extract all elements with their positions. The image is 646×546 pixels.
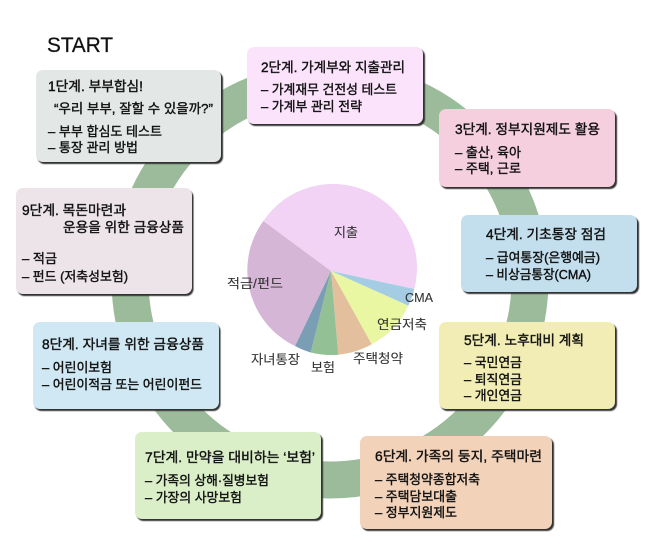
list item: – 통장 관리 방법 xyxy=(48,140,138,155)
heading: step 4: 4단계. 기초통장 점검 xyxy=(486,227,606,242)
list item: – 가계재무 건전성 테스트 xyxy=(261,82,397,97)
list item: – 주택청약종합저축 xyxy=(375,472,480,487)
list item: – 가계부 관리 전략 xyxy=(261,99,362,114)
slice: 연금저축 xyxy=(331,271,408,344)
list item: – 어린이보험 xyxy=(42,360,112,375)
panel: step 2 xyxy=(247,47,425,126)
panel: step 5 xyxy=(439,322,617,411)
panel: step 4 xyxy=(461,215,639,294)
slice: 적금/펀드 xyxy=(247,221,331,346)
panel: step 8 xyxy=(33,322,220,411)
pie label: 연금저축: 연금저축 xyxy=(377,317,427,332)
heading: step 3: 3단계. 정부지원제도 활용 xyxy=(455,122,600,137)
pie label: 지출: 지출 xyxy=(334,225,358,240)
quote: step 1: “우리 부부, 잘할 수 있을까?” xyxy=(54,101,213,116)
circular path ring xyxy=(130,80,530,480)
heading: step 9 line 2: 운용을 위한 금융상품 xyxy=(63,220,184,235)
panel: step 3 xyxy=(439,109,617,189)
list item: – 개인연금 xyxy=(464,388,522,403)
list item: – 가장의 사망보험 xyxy=(145,490,242,505)
list item: – 가족의 상해·질병보험 xyxy=(145,473,269,488)
heading: step 6: 6단계. 가족의 둥지, 주택마련 xyxy=(375,449,542,464)
pie label: 자녀통장: 자녀통장 xyxy=(251,352,300,367)
list item: – 주택, 근로 xyxy=(455,161,521,176)
list item: – 국민연금 xyxy=(464,355,522,370)
heading: step 5: 5단계. 노후대비 계획 xyxy=(464,333,584,348)
list item: – 출산, 육아 xyxy=(455,145,521,160)
list item: – 급여통장(은행예금) xyxy=(486,250,600,265)
heading: step 1: 1단계. 부부합심! xyxy=(48,79,143,94)
panel: step 9 xyxy=(16,188,194,296)
slice: 자녀통장 xyxy=(295,271,331,352)
list item: – 퇴직연금 xyxy=(464,372,522,387)
pie label: 적금/펀드: 적금/펀드 xyxy=(227,276,283,291)
slice: CMA xyxy=(331,271,414,306)
panel: step 6 xyxy=(360,436,554,531)
heading: step 7: 7단계. 만약을 대비하는 ‘보험’ xyxy=(145,450,315,465)
list item: – 주택담보대출 xyxy=(375,489,457,504)
title: START: START xyxy=(47,34,113,57)
pie label: 보험: 보험 xyxy=(311,360,335,375)
heading: step 8: 8단계. 자녀를 위한 금융상품 xyxy=(42,337,204,352)
list item: – 적금 xyxy=(22,251,57,266)
pie label: CMA: CMA xyxy=(405,290,433,305)
pie label: 주택청약: 주택청약 xyxy=(353,351,403,366)
slice: 주택청약 xyxy=(331,271,372,355)
panel: step 1 xyxy=(36,70,223,164)
pie chart xyxy=(247,184,417,355)
list item: – 펀드 (저축성보험) xyxy=(22,269,128,284)
list item: – 정부지원제도 xyxy=(375,505,457,520)
slice: 지출 xyxy=(263,184,417,289)
list item: – 어린이적금 또는 어린이펀드 xyxy=(42,377,202,392)
heading: step 9 line 1: 9단계. 목돈마련과 xyxy=(22,203,126,218)
list item: – 부부 합심도 테스트 xyxy=(48,124,162,139)
slice: 보험 xyxy=(311,271,338,355)
heading: step 2: 2단계. 가계부와 지출관리 xyxy=(261,60,405,75)
list item: – 비상금통장(CMA) xyxy=(486,267,591,282)
panel: step 7 xyxy=(135,432,323,521)
